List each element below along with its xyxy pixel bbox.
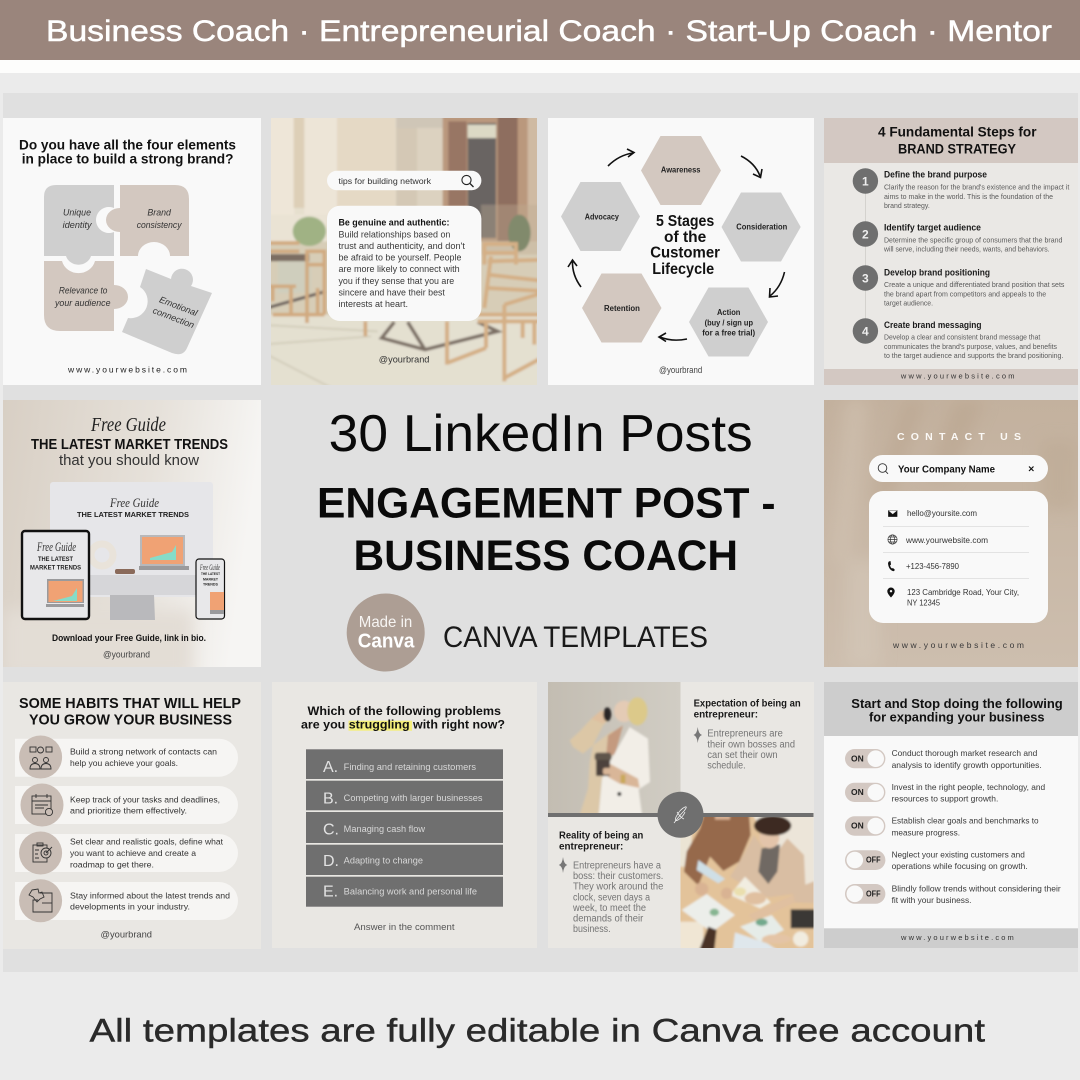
device mockup: tablet: Free Guide — [36, 539, 76, 554]
script heading: Free Guide — [90, 414, 166, 436]
title: 30 LinkedIn Posts: 30 LinkedIn Posts — [329, 405, 753, 463]
step 4 — [853, 318, 1063, 360]
panel: networking tips on patio photo — [271, 118, 537, 385]
right chairs — [447, 242, 548, 381]
heading: habits — [19, 695, 241, 728]
tip card: you if they sense that you are — [338, 276, 454, 286]
icon: puzzle pieces — [29, 889, 52, 912]
raised sleeve — [570, 719, 608, 754]
tip card: sincere and have their best — [338, 288, 445, 298]
step 1: aims to make in the world. This is the foundation of the — [884, 192, 1053, 201]
puzzle piece: emotional connection: Emotional — [158, 294, 200, 318]
option E: Balancing work and personal life — [344, 886, 477, 896]
white jacket — [598, 727, 650, 822]
tip card: interests at heart. — [338, 299, 408, 309]
puzzle piece: brand consistency: Brand — [147, 208, 172, 218]
head — [614, 701, 634, 722]
option B: Competing with larger businesses — [344, 793, 483, 803]
step 3: 3 — [862, 272, 869, 286]
habit 4: developments in your industry. — [70, 902, 190, 912]
heading: habits: YOU GROW YOUR BUSINESS — [29, 711, 232, 728]
panel: brand strategy steps — [824, 118, 1078, 385]
device mockup: phone: MARKET — [203, 578, 219, 582]
step 3: Develop brand positioning — [884, 267, 990, 277]
tip card: Build relationships based on — [338, 229, 450, 239]
habit 3: you want to achieve and create a — [70, 848, 196, 858]
heading: quiz question: are you struggling with right now? — [301, 717, 505, 731]
toggle row: market research: Conduct thorough market research and — [892, 748, 1037, 758]
device mockup: phone: THE LATEST — [201, 572, 221, 576]
hexagon: retention: Retention — [604, 304, 640, 313]
reality text — [559, 831, 663, 935]
title: engagement post business coach: BUSINESS COACH — [354, 532, 738, 580]
habit 4: Stay informed about the latest trends and — [70, 890, 230, 900]
icon: envelope — [888, 510, 898, 517]
reality text: boss: their customers. — [573, 871, 663, 882]
hexagon: action: Action — [717, 308, 741, 317]
habit 4 — [15, 879, 238, 922]
option B: B. — [323, 790, 338, 807]
brand handle: @yourbrand — [659, 365, 702, 375]
heading: quiz question — [301, 704, 505, 731]
habit 3: roadmap to get there. — [70, 859, 154, 869]
hexagon: awareness: Awareness — [661, 166, 701, 175]
device mockup: tablet: MARKET TRENDS — [30, 564, 82, 572]
brand handle: @yourbrand — [379, 354, 429, 365]
reality text: demands of their — [573, 913, 644, 924]
heading: brand strategy: 4 Fundamental Steps for — [878, 125, 1037, 140]
habit 1: Build a strong network of contacts can — [70, 747, 217, 757]
puzzle piece: unique identity: identity — [63, 220, 92, 230]
icon: phone — [888, 561, 895, 571]
toggle row: neglect — [845, 849, 1028, 871]
step 4: 4 — [862, 324, 869, 338]
step 3: Create a unique and differentiated brand position that sets — [884, 280, 1065, 289]
option E — [306, 877, 503, 907]
heading: contact us: CONTACT US — [897, 431, 1021, 443]
toggle row: neglect: operations while focusing on growth. — [892, 861, 1028, 871]
puzzle piece: emotional connection: connection — [151, 305, 196, 330]
lifecycle title: Lifecycle — [652, 261, 715, 278]
habit 1: help you achieve your goals. — [70, 758, 178, 768]
panel: start and stop toggles — [824, 682, 1078, 948]
heading: start and stop: Start and Stop doing the following — [851, 696, 1063, 711]
title: engagement post business coach — [317, 480, 776, 580]
device mockup: monitor: Free Guide — [109, 495, 159, 510]
puzzle piece: relevance to your audience — [44, 261, 128, 331]
cycle arrows — [568, 149, 784, 342]
lifecycle title: 5 Stages — [656, 213, 714, 230]
toggle row: market research: analysis to identify growth opportunities. — [892, 760, 1042, 770]
icon: sparkle — [559, 857, 567, 873]
hexagon: action — [689, 288, 768, 356]
panel: expectation vs reality — [548, 682, 823, 958]
option C — [306, 812, 503, 843]
step 1: Clarify the reason for the brand's existence and the impact it — [884, 183, 1069, 192]
toggle row: market research: ON — [851, 753, 864, 763]
panel: struggling quiz — [272, 682, 537, 948]
step 1: 1 — [862, 174, 869, 188]
device mockup: phone: Free Guide — [199, 563, 220, 572]
top banner — [0, 0, 1080, 73]
reality text: Entrepreneurs have a — [573, 860, 662, 871]
divider band — [548, 813, 814, 817]
heading: four elements: Do you have all the four elements — [19, 136, 236, 152]
habit 2: Keep track of your tasks and deadlines, — [70, 794, 220, 804]
step 4: to the target audience and supports the brand positioning. — [884, 351, 1063, 360]
left table and chair — [261, 254, 309, 261]
habit 3 — [15, 832, 238, 874]
brand handle: @yourbrand — [103, 650, 150, 661]
device mockup: phone: TRENDS — [203, 582, 218, 586]
website url: www.yourwebsite.com — [67, 365, 187, 375]
option B — [306, 781, 503, 810]
heading: brand strategy: BRAND STRATEGY — [898, 141, 1016, 156]
step 1: brand strategy. — [884, 201, 930, 210]
option E: E. — [323, 884, 338, 901]
phone — [603, 707, 611, 721]
expectation text: entrepreneur: — [694, 710, 758, 721]
step 2: 2 — [862, 228, 869, 242]
expectation text: their own bosses and — [707, 739, 795, 750]
puzzle piece: unique identity — [44, 185, 114, 265]
hexagon: action: (buy / sign up — [705, 318, 753, 327]
table base — [382, 322, 498, 350]
step 2 — [853, 221, 1062, 254]
icon: location pin — [887, 588, 895, 598]
website url: www.yourwebsite.com — [892, 640, 1024, 650]
hexagon: advocacy: Advocacy — [585, 212, 619, 221]
hexagon: consideration: Consideration — [736, 222, 787, 231]
step 2: Identify target audience — [884, 223, 981, 233]
option A: A. — [323, 759, 338, 776]
heading: four elements — [19, 136, 236, 166]
subheading: that you should know — [59, 453, 200, 469]
contact card: NY 12345 — [907, 598, 940, 608]
hexagon: advocacy — [561, 182, 640, 251]
reality text: business. — [573, 924, 611, 935]
hexagon: awareness — [641, 136, 721, 205]
panel: customer lifecycle — [548, 118, 814, 385]
toggle row: invest: ON — [851, 787, 864, 797]
toggle row: blind trends: fit with your business. — [892, 895, 972, 905]
device mockup: monitor: THE LATEST MARKET TRENDS — [77, 510, 189, 519]
step 3 — [853, 265, 1065, 307]
toggle row: goals — [845, 816, 1039, 838]
reality text: They work around the — [573, 882, 663, 893]
tip card: are more likely to connect with — [338, 264, 460, 274]
prompt: Answer in the comment — [354, 922, 455, 933]
puzzle piece: relevance to your audience: your audience — [54, 298, 110, 308]
tip card: trust and authenticity, and don't — [338, 241, 465, 251]
skin at chest — [606, 725, 623, 755]
plants — [293, 217, 326, 246]
made in canva badge: Canva — [358, 630, 415, 652]
wall bands — [271, 118, 294, 214]
option D: D. — [323, 853, 339, 870]
toggle row: invest: resources to support growth. — [892, 794, 998, 804]
toggle row: neglect: Neglect your existing customers and — [892, 849, 1025, 859]
search bar: Your Company Name — [898, 465, 995, 476]
heading: market trends: THE LATEST MARKET TRENDS — [31, 437, 228, 453]
tip card: Be genuine and authentic: — [338, 218, 449, 228]
toggle row: blind trends: OFF — [866, 888, 881, 898]
puzzle piece: brand consistency — [106, 185, 189, 256]
puzzle piece: brand consistency: consistency — [137, 220, 182, 230]
lifecycle title: Customer — [650, 245, 720, 262]
reality text: Reality of being an — [559, 831, 643, 842]
tip card: be afraid to be yourself. People — [338, 252, 461, 262]
terrace background — [271, 240, 537, 315]
panel: contact us — [824, 400, 1078, 667]
icon: goal checklist — [33, 843, 52, 862]
step 3: target audience. — [884, 298, 933, 307]
reality text: entrepreneur: — [559, 842, 623, 853]
expectation text: can set their own — [707, 750, 778, 761]
habit 1 — [15, 736, 238, 778]
expectation text: Entrepreneurs are — [707, 729, 783, 740]
heading: habits: SOME HABITS THAT WILL HELP — [19, 695, 241, 712]
photo: team meeting — [680, 817, 814, 948]
brown sweater person — [683, 817, 752, 885]
puzzle piece: emotional connection — [122, 269, 212, 354]
toggle row: goals: ON — [851, 821, 864, 831]
toggle row: market research — [845, 748, 1042, 770]
top banner: Business Coach · Entrepreneurial Coach · Start-Up Coach · Mentor — [46, 15, 1052, 48]
website url: www.yourwebsite.com — [900, 933, 1014, 942]
door — [442, 118, 529, 242]
heading: brand strategy — [878, 125, 1037, 156]
call to action: Download your Free Guide, link in bio. — [52, 633, 206, 644]
step 3: the brand apart from competitors and appeals to the — [884, 289, 1046, 298]
icon: globe — [888, 535, 897, 544]
step 1 — [853, 168, 1069, 210]
expectation text: Expectation of being an — [694, 699, 801, 710]
expectation text: schedule. — [707, 760, 746, 771]
option C: Managing cash flow — [344, 824, 426, 834]
step 1: Define the brand purpose — [884, 170, 987, 180]
toggle row: goals: measure progress. — [892, 828, 960, 838]
brand handle: @yourbrand — [100, 929, 152, 940]
device mockup: monitor — [50, 482, 213, 620]
forearm and cup — [608, 764, 640, 788]
lifecycle title: of the — [664, 229, 707, 246]
icon: sparkle — [694, 727, 702, 743]
hexagon: consideration — [722, 192, 801, 262]
panel: four brand elements puzzle — [3, 118, 261, 385]
device mockup: phone — [196, 559, 224, 619]
footer caption: All templates are fully editable in Canva free account — [90, 1013, 985, 1049]
beige jacket side — [580, 734, 608, 813]
search bar: tips for building network — [338, 176, 432, 186]
step 4: Create brand messaging — [884, 320, 982, 330]
toggle row: blind trends: Blindly follow trends without considering their — [892, 883, 1061, 893]
habit 2 — [15, 784, 238, 826]
habit 3: Set clear and realistic goals, define what — [70, 837, 224, 847]
hands — [695, 882, 708, 896]
reality text: week, to meet the — [572, 903, 646, 914]
website url: www.yourwebsite.com — [900, 372, 1014, 381]
heading: start and stop: for expanding your business — [869, 709, 1044, 724]
photo: woman on the phone — [548, 682, 680, 822]
reality text: clock, seven days a — [573, 892, 651, 903]
hexagon: retention — [582, 274, 662, 342]
option A — [306, 749, 503, 779]
center title block — [317, 405, 776, 672]
highlight: struggling — [348, 721, 412, 731]
panel: business habits — [3, 682, 261, 949]
hexagon: action: for a free trial) — [702, 328, 756, 337]
search bar — [327, 171, 481, 190]
contact card — [869, 491, 1048, 623]
option D: Adapting to change — [344, 855, 423, 865]
made in canva badge — [347, 594, 425, 672]
search bar — [869, 455, 1048, 482]
heading: start and stop — [851, 696, 1063, 724]
device mockup: tablet: THE LATEST — [38, 556, 73, 563]
toggle row: neglect: OFF — [866, 855, 881, 865]
device mockup: tablet — [22, 531, 89, 619]
toggle row: invest: Invest in the right people, technology, and — [892, 782, 1045, 792]
heading: quiz question: Which of the following problems — [308, 704, 501, 718]
toggle row: invest — [845, 782, 1045, 804]
habit 2: and prioritize them effectively. — [70, 806, 187, 816]
puzzle piece: unique identity: Unique — [63, 208, 91, 218]
panel: free guide — [3, 400, 261, 680]
papers — [730, 877, 771, 908]
emblem circle — [658, 792, 704, 838]
step 2: Determine the specific group of consumers that the brand — [884, 236, 1062, 245]
floor — [271, 314, 537, 322]
expectation text — [694, 699, 801, 771]
option D — [306, 845, 503, 875]
toggle row: blind trends — [845, 883, 1061, 905]
title: engagement post business coach: ENGAGEMENT POST - — [317, 480, 776, 528]
lifecycle title — [650, 213, 720, 278]
made in canva badge: Made in — [359, 614, 412, 631]
puzzle piece: relevance to your audience: Relevance to — [59, 286, 107, 296]
beige jacket person — [730, 835, 805, 897]
option C: C. — [323, 822, 339, 839]
toggle row: goals: Establish clear goals and benchmarks to — [892, 816, 1039, 826]
photo: patio — [271, 118, 537, 385]
sleeve and forearm — [792, 878, 823, 904]
contact card: +123-456-7890 — [906, 561, 959, 571]
step 2: will serve, including their needs, wants, and behaviors. — [883, 245, 1050, 254]
contact card: www.yourwebsite.com — [905, 535, 988, 545]
icon: calendar — [32, 794, 53, 816]
contact card: hello@yoursite.com — [907, 508, 977, 518]
tip card — [327, 206, 481, 321]
step 4: Develop a clear and consistent brand message that — [884, 333, 1040, 342]
contact card: 123 Cambridge Road, Your City, — [907, 587, 1019, 597]
step 4: communicates the brand's purpose, values, and benefits — [884, 342, 1057, 351]
heading: four elements: in place to build a strong brand? — [22, 150, 234, 166]
icon: network people — [30, 747, 52, 769]
canva templates label: CANVA TEMPLATES — [443, 621, 708, 654]
option A: Finding and retaining customers — [344, 762, 477, 772]
